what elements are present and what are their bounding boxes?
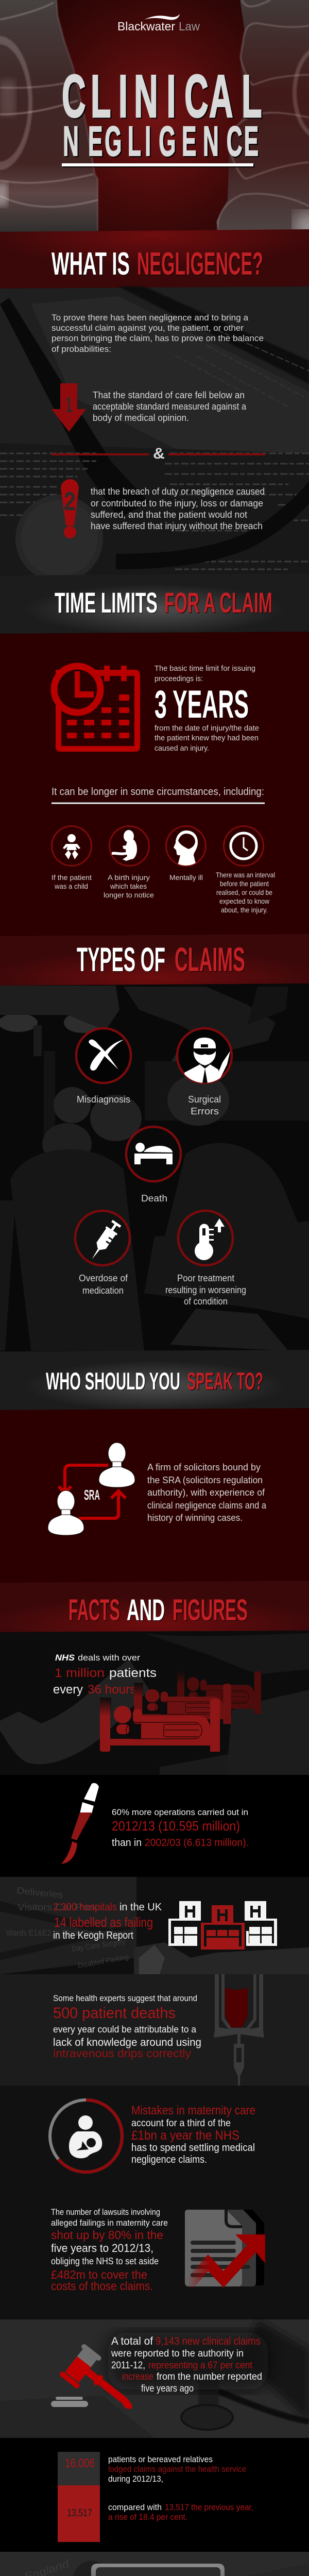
panel: hero <box>0 0 309 241</box>
text: total of new clinical claims: 9,143 new clinical claims <box>156 2335 261 2347</box>
text: 2,300 hospitals: 2,300 hospitals <box>53 1902 117 1913</box>
circumstance: interval: realised, or could be <box>216 888 272 896</box>
text: number of lawsuits <box>51 2208 168 2293</box>
intro text <box>52 313 264 354</box>
type: misdiagnosis <box>76 1028 131 1105</box>
text: number of lawsuits: costs of those claims. <box>51 2279 153 2293</box>
circumstance: mentally ill: Mentally ill <box>169 873 203 882</box>
icon: cross mark <box>89 1040 124 1071</box>
panel: types of claims banner <box>0 934 309 986</box>
type: surgical errors <box>177 1028 232 1116</box>
panel: fact intravenous <box>0 1974 309 2086</box>
icon: baby <box>63 834 80 859</box>
panel: book and stethoscope section <box>0 286 309 582</box>
panel: time limits details <box>0 632 309 938</box>
text: patients or bereaved relatives: patients or bereaved relatives <box>108 2454 213 2464</box>
heading: what is negligence: WHAT IS <box>52 246 130 282</box>
icon: hospital beds <box>100 1670 261 1752</box>
panel: fact hospitals <box>0 1877 309 1974</box>
text: basic time limit <box>154 664 255 683</box>
spine x-ray left <box>0 0 98 233</box>
text: from the date of injury <box>154 724 259 753</box>
panel: who should you speak to <box>0 1408 309 1583</box>
text: 500 patient deaths <box>53 1994 201 2060</box>
panel: who should you speak to banner <box>0 1350 309 1410</box>
text: a firm of solicitors: authority), with experience of <box>147 1487 265 1498</box>
intro text: successful claim against you, the patient, or other <box>52 323 244 333</box>
circumstance: interval: expected to know <box>219 897 270 905</box>
text: total of new clinical claims: A total of <box>111 2335 153 2347</box>
text: total of new clinical claims: from the number reported <box>157 2371 262 2382</box>
text: total of new clinical claims <box>111 2335 262 2394</box>
text: total of new clinical claims: representing a 67 per cent <box>148 2360 253 2371</box>
logo: Blackwater Law: Law <box>179 20 200 33</box>
panel: fact maternity and lawsuits <box>0 2086 309 2319</box>
text: mistakes in maternity care <box>131 2104 255 2165</box>
text: can be longer: It can be longer in some circumstances, including: <box>52 786 264 798</box>
heading: facts and figures: FIGURES <box>173 1594 248 1627</box>
heading: facts and figures: AND <box>127 1594 165 1627</box>
heading: what is negligence <box>52 246 263 282</box>
chart: claims bars: 13,517 <box>67 2507 92 2519</box>
chart: claims bars: 16,006 <box>65 2456 95 2470</box>
text: number of lawsuits: five years to 2012/13, <box>51 2242 153 2255</box>
text: total of new clinical claims: five years ago <box>141 2383 194 2394</box>
text: 60% more operations: 2002/03 (6.613 million). <box>145 1837 249 1849</box>
icon: hospital right <box>245 1901 277 1946</box>
text: patients or bereaved relatives: during 2012/13, <box>108 2474 163 2484</box>
text: 2,300 hospitals: 14 labelled as failing <box>54 1914 153 1930</box>
circumstance: birth injury: longer to notice <box>104 891 154 899</box>
chart: claims bars <box>58 2452 100 2542</box>
point two text: or contributed to the injury, loss or damage <box>91 498 263 509</box>
text: from the date of injury: caused an injury. <box>154 744 209 753</box>
text: 2,300 hospitals <box>53 1902 162 1941</box>
type: overdose: medication <box>82 1285 124 1296</box>
intro text: To prove there has been negligence and to bring a <box>52 313 249 323</box>
text: number of lawsuits: alleged failings in maternity care <box>51 2218 168 2228</box>
text: NHS deals with <box>53 1653 157 1697</box>
heading: time limits for a claim: TIME LIMITS <box>55 586 158 619</box>
icon: fetus <box>112 830 137 861</box>
point two text: suffered, and that the patient would not <box>91 510 247 520</box>
type: poor treatment: Poor treatment <box>177 1273 234 1283</box>
type: poor treatment <box>165 1211 246 1307</box>
text: mistakes in maternity care: £1bn a year the NHS <box>131 2128 239 2143</box>
circumstance: interval: before the patient <box>220 879 269 888</box>
text: mistakes in maternity care: has to spend settling medical <box>131 2142 255 2154</box>
text: NHS deals with: 36 hours. <box>88 1683 140 1697</box>
icon: mother and baby ring <box>50 2100 122 2172</box>
icon: SRA exchange: SRA <box>84 1487 100 1503</box>
type: overdose <box>75 1211 130 1296</box>
text: from the date of injury: the patient knew they had been <box>154 734 259 742</box>
text: 500 patient deaths: intravenous drips correctly <box>53 2047 191 2060</box>
type: misdiagnosis: Misdiagnosis <box>77 1094 130 1105</box>
intro text: of probabilities: <box>52 344 111 354</box>
panel: fact operations <box>0 1775 309 1877</box>
panel: facts and figures banner <box>0 1581 309 1632</box>
text: mistakes in maternity care: negligence claims. <box>131 2154 207 2165</box>
text: compared with <box>108 2502 253 2522</box>
panel: budget <box>0 2552 309 2576</box>
logo: Blackwater Law <box>117 14 200 33</box>
type: surgical errors: Surgical <box>188 1094 221 1105</box>
text: 500 patient deaths: Some health experts suggest that around <box>53 1994 197 2003</box>
circumstance: birth injury <box>104 826 154 899</box>
text: 2,300 hospitals: in the Keogh Report <box>53 1930 133 1941</box>
text: mistakes in maternity care: Mistakes in maternity care <box>131 2104 255 2117</box>
icon: scalpel <box>61 1783 99 1864</box>
panel: fact lodged claims <box>0 2438 309 2552</box>
title: NEGLIGENCE <box>63 117 259 165</box>
icon: arrow number 1 <box>52 383 86 432</box>
text: NHS deals with: NHS <box>55 1653 75 1663</box>
heading: who should you speak to: WHO SHOULD YOU <box>46 1367 180 1395</box>
text: basic time limit: proceedings is: <box>154 674 203 683</box>
point one text: body of medical opinion. <box>93 413 189 423</box>
icon: syringe <box>87 1219 123 1263</box>
icon: hospital left <box>168 1901 201 1946</box>
logo: Blackwater Law: Blackwater <box>117 20 175 33</box>
text: 60% more operations: than in <box>112 1837 142 1849</box>
type: surgical errors: Errors <box>191 1106 219 1116</box>
point one text: That the standard of care fell below an <box>93 390 245 400</box>
text: number of lawsuits: The number of lawsuits involving <box>51 2208 160 2217</box>
icon: exclamation number 2: 2 <box>64 487 76 516</box>
text: compared with: 13,517 the previous year, <box>165 2502 253 2512</box>
icon: gavel <box>51 2343 145 2422</box>
text: NHS deals with: 1 million <box>55 1666 105 1680</box>
text: compared with: a rise of 18.4 per cent. <box>108 2512 187 2522</box>
type: poor treatment: of condition <box>184 1296 228 1307</box>
point two text <box>91 486 265 531</box>
text: basic time limit: The basic time limit for issuing <box>154 664 255 673</box>
text: 60% more operations: 60% more operations carried out in <box>112 1807 248 1817</box>
text: can be longer <box>52 786 265 804</box>
text: total of new clinical claims: 2011-12, <box>111 2360 145 2371</box>
spine x-ray right <box>216 0 309 241</box>
panel: what is negligence banner <box>0 229 309 289</box>
ampersand divider <box>52 445 265 462</box>
icon: clock <box>231 833 256 859</box>
text: compared with: compared with <box>108 2502 162 2512</box>
icon: exclamation number 2 <box>61 479 79 538</box>
text: mistakes in maternity care: account for a third of the <box>131 2118 231 2129</box>
panel: fact 1 million patients <box>0 1631 309 1775</box>
panel: fact hospitals: Deliveries <box>16 1885 63 1900</box>
text: number of lawsuits: £482m to cover the <box>51 2268 147 2281</box>
text: patients or bereaved relatives: lodged claims against the health service <box>108 2464 246 2474</box>
panel: fact hospitals: Day Care Surgery <box>71 1937 126 1954</box>
type: death: Death <box>141 1193 167 1204</box>
icon: IV drip bag <box>214 1974 264 2086</box>
text: a firm of solicitors: clinical negligence claims and a <box>147 1500 267 1511</box>
heading: types of claims: TYPES OF <box>77 940 165 978</box>
heading: types of claims: CLAIMS <box>175 940 245 978</box>
circumstance: child: was a child <box>54 882 88 890</box>
text: 500 patient deaths: 500 patient deaths <box>53 2005 176 2022</box>
text: 60% more operations: 2012/13 (10.595 million) <box>112 1818 240 1834</box>
text: 2,300 hospitals: in the UK <box>119 1902 162 1913</box>
text: number of lawsuits: obliging the NHS to set aside <box>51 2256 159 2266</box>
text: total of new clinical claims: were reported to the authority in <box>111 2348 244 2359</box>
icon: calculator <box>91 2564 225 2576</box>
text: from the date of injury: from the date of injury/the date <box>154 724 259 733</box>
text: NHS deals with: every <box>53 1683 83 1697</box>
circumstance: interval: There was an interval <box>216 871 275 879</box>
point two text: that the breach of duty or negligence caused <box>91 486 265 497</box>
text: a firm of solicitors: history of winning cases. <box>147 1513 243 1523</box>
text: total of new clinical claims: increase <box>122 2371 153 2382</box>
panel: time limits banner <box>0 573 309 634</box>
panel: types of claims <box>0 984 309 1351</box>
type: poor treatment: resulting in worsening <box>165 1285 246 1295</box>
text: 60% more operations <box>112 1807 249 1849</box>
icon: thermometer and arrow <box>195 1218 225 1260</box>
title <box>62 63 262 166</box>
text: patients or bereaved relatives <box>108 2454 246 2484</box>
circumstance: interval: about, the injury. <box>221 906 268 914</box>
text: a firm of solicitors <box>147 1462 267 1523</box>
heading: facts and figures: FACTS <box>68 1594 120 1627</box>
icon: surgeon <box>184 1038 230 1087</box>
type: death <box>126 1127 181 1204</box>
panel: fact hospitals: Wards E1&E2, K Block, Dermatology <box>6 1929 125 1938</box>
text: a firm of solicitors: the SRA (solicitors regulation <box>147 1475 263 1485</box>
panel: fact hospitals: Visitors Car Park <box>18 1902 98 1912</box>
icon: bed <box>134 1143 173 1164</box>
title: CLINICAL <box>62 63 262 130</box>
icon: hospital center <box>201 1905 245 1950</box>
ampersand divider: & <box>153 445 165 462</box>
text: a firm of solicitors: A firm of solicitors bound by <box>147 1462 261 1472</box>
type: overdose: Overdose of <box>79 1273 128 1283</box>
icon: documents and rising arrow <box>185 2210 265 2286</box>
point two text: have suffered that injury without the breach <box>91 521 263 531</box>
icon: SRA exchange <box>48 1443 135 1535</box>
intro text: person bringing the claim, has to prove on the balance <box>52 333 264 343</box>
text: 500 patient deaths: every year could be attributable to a <box>53 2024 197 2035</box>
circumstance: birth injury: A birth injury <box>108 873 150 882</box>
icon: arrow number 1: 1 <box>66 393 72 417</box>
panel: fact new clinical claims <box>0 2319 309 2438</box>
text: NHS deals with: deals with over <box>78 1653 140 1663</box>
icon: head with brain <box>174 831 198 866</box>
icon: clock and calendar <box>54 666 140 752</box>
text: NHS deals with: patients <box>109 1666 157 1680</box>
point one text <box>93 390 247 423</box>
point one text: acceptable standard measured against a <box>93 401 247 412</box>
circumstance: child: If the patient <box>52 873 92 882</box>
heading: facts and figures <box>68 1594 248 1627</box>
text: 500 patient deaths: lack of knowledge around using <box>53 2037 201 2048</box>
circumstance: mentally ill <box>166 826 206 882</box>
circumstance: birth injury: which takes <box>110 882 147 890</box>
circumstance: child <box>52 826 92 890</box>
text: number of lawsuits: shot up by 80% in the <box>51 2228 163 2242</box>
panel: fact hospitals: Disabled Parking <box>77 1953 129 1970</box>
circumstance: interval <box>216 826 275 914</box>
